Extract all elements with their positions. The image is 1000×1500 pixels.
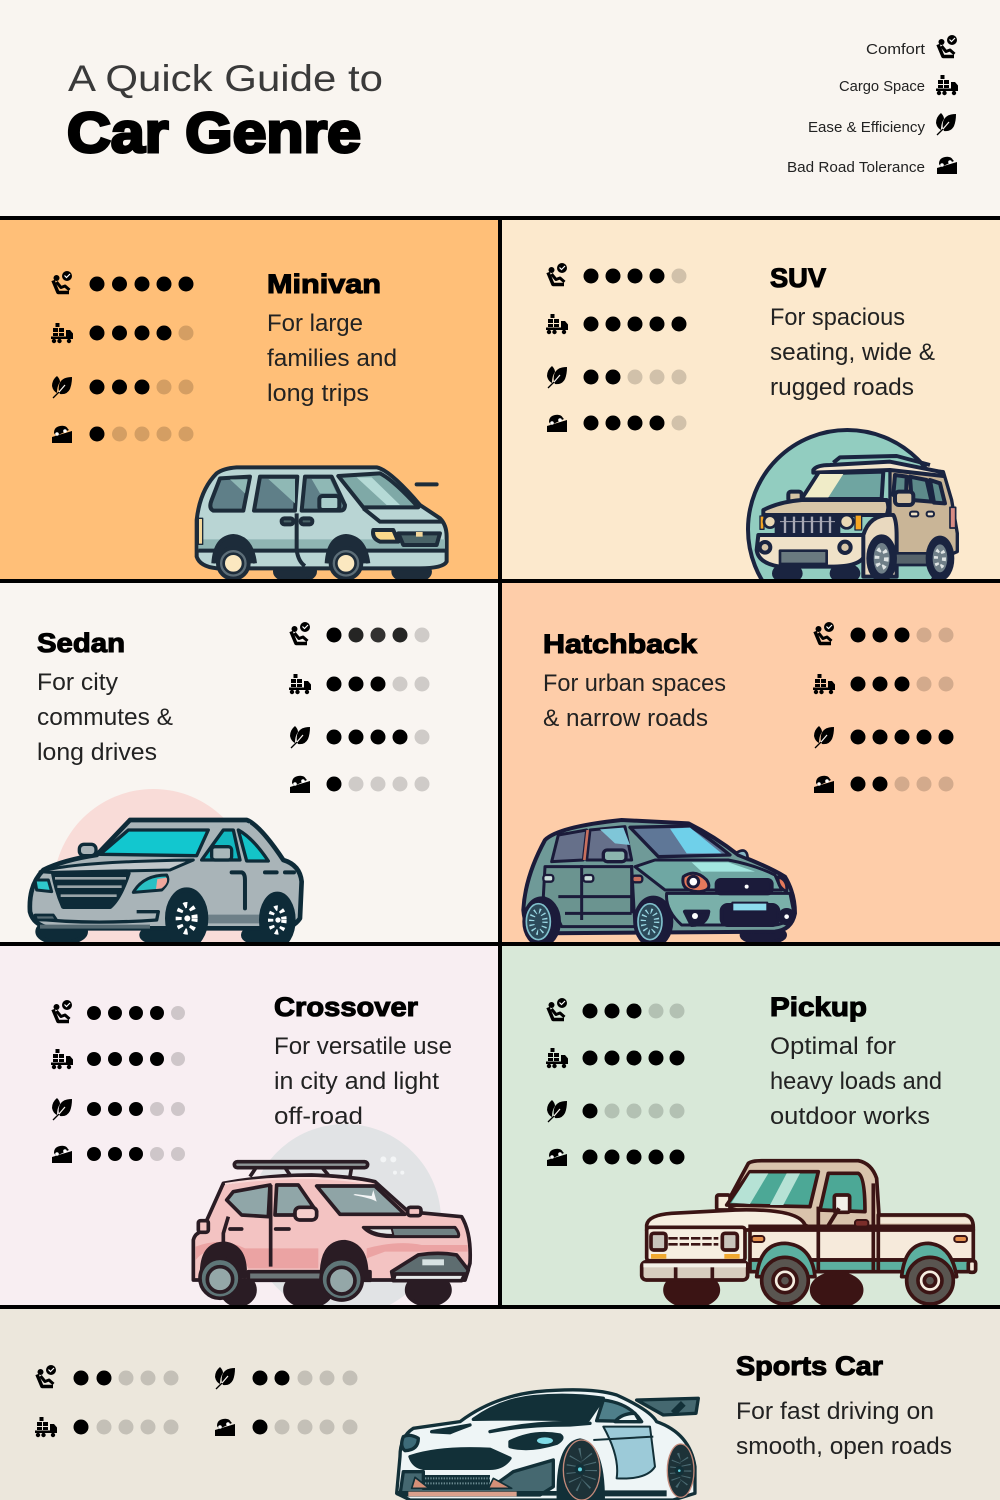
panel: sports car background <box>0 1307 1000 1500</box>
sports car ratings <box>35 1365 358 1437</box>
crossover text: For versatile use <box>274 1033 452 1060</box>
sedan text: For city <box>37 669 119 696</box>
sports car text: smooth, open roads <box>736 1433 952 1460</box>
hatchback illustration <box>523 820 795 946</box>
crossover ratings <box>51 1000 185 1163</box>
hatchback text: Hatchback <box>543 629 698 659</box>
title: A Quick Guide to <box>68 58 383 99</box>
pickup ratings <box>546 998 684 1166</box>
hatchback text <box>543 629 726 732</box>
legend <box>787 35 958 176</box>
panel: SUV background <box>500 218 1000 581</box>
frame lines <box>0 216 1000 1309</box>
crossover text <box>274 992 452 1130</box>
minivan text <box>267 269 397 407</box>
minivan ratings <box>51 271 194 443</box>
sedan text: long drives <box>37 739 157 766</box>
pickup text: Optimal for <box>770 1033 896 1060</box>
SUV text: rugged roads <box>770 374 914 401</box>
legend: Ease & Efficiency <box>808 119 925 136</box>
crossover illustration <box>193 1124 470 1316</box>
sports car text: Sports Car <box>736 1351 884 1381</box>
pickup text: outdoor works <box>770 1103 930 1130</box>
minivan illustration <box>197 467 447 582</box>
SUV text: For spacious <box>770 304 905 331</box>
sports car text: For fast driving on <box>736 1398 934 1425</box>
title: Car Genre <box>67 101 361 165</box>
sedan text <box>37 628 173 766</box>
panel: sedan background <box>0 581 500 944</box>
pickup text: Pickup <box>770 992 867 1022</box>
SUV text: seating, wide & <box>770 339 935 366</box>
title <box>67 58 383 165</box>
hatchback text: For urban spaces <box>543 670 726 697</box>
sports car text <box>736 1351 952 1460</box>
pickup text: heavy loads and <box>770 1068 942 1095</box>
sedan text: commutes & <box>37 704 173 731</box>
SUV ratings <box>546 263 686 432</box>
crossover text: in city and light <box>274 1068 439 1095</box>
sedan text: Sedan <box>37 628 125 658</box>
panel: hatchback background <box>500 581 1000 944</box>
legend: Comfort <box>866 41 926 58</box>
panel: pickup background <box>500 944 1000 1307</box>
minivan text: families and <box>267 345 397 372</box>
pickup illustration <box>642 1161 976 1307</box>
crossover text: off-road <box>274 1103 363 1130</box>
minivan text: For large <box>267 310 363 337</box>
minivan text: Minivan <box>267 269 381 299</box>
panel: minivan background <box>0 218 500 581</box>
hatchback ratings <box>813 622 954 793</box>
SUV text: SUV <box>770 263 826 293</box>
panel: crossover background <box>0 944 500 1307</box>
pickup text <box>770 992 942 1130</box>
sedan ratings <box>289 622 430 793</box>
legend: Bad Road Tolerance <box>787 159 925 176</box>
crossover text: Crossover <box>274 992 419 1022</box>
header background <box>0 0 1000 218</box>
SUV text <box>770 263 935 401</box>
hatchback text: & narrow roads <box>543 705 708 732</box>
legend: Cargo Space <box>839 78 925 95</box>
SUV illustration <box>746 428 959 579</box>
minivan text: long trips <box>267 380 369 407</box>
sports car illustration <box>397 1390 698 1500</box>
sedan illustration <box>30 789 302 947</box>
